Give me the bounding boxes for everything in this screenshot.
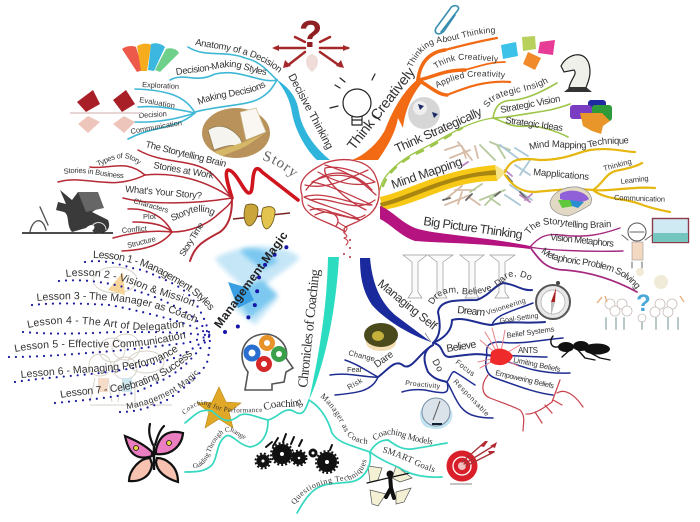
icon: head with gears	[242, 334, 293, 390]
magenta labels: The Storytelling Brain	[524, 218, 611, 233]
navy labels: Managing Self	[375, 276, 440, 333]
navy labels: Believe	[446, 338, 477, 355]
icon: theatre masks	[233, 204, 290, 229]
icon: magic blue box	[215, 246, 300, 325]
story labels: Characters	[132, 196, 170, 215]
navy labels: Belief Systems	[506, 324, 555, 340]
lesson labels: Lesson 6 - Managing Performance	[21, 346, 178, 378]
icon: chess knight	[561, 55, 592, 92]
teal labels: Coaching	[264, 398, 303, 410]
orange labels: Think Creatively	[345, 64, 419, 153]
decisive labels: Anatomy of a Decision	[195, 39, 282, 73]
branch: Big Picture Thinking	[380, 206, 640, 293]
icon: stick figure with picture	[622, 218, 688, 268]
branch: Story	[57, 139, 300, 262]
story labels: Story Time	[177, 221, 206, 258]
image: faded mind map	[443, 142, 532, 205]
yellow sub-branches	[505, 149, 670, 212]
green labels: Strategic Vision	[499, 94, 561, 116]
icon: paperclip	[435, 6, 459, 34]
icon: group with question mark	[597, 268, 684, 329]
panel: Management Magic lessons	[8, 228, 291, 414]
yellow labels: Learning	[620, 174, 649, 186]
story labels: Stories at Work	[152, 160, 215, 182]
orange labels: Thinking About Thinking	[406, 27, 495, 66]
icon: coloured brain	[550, 187, 592, 216]
story labels: Structure	[126, 234, 157, 250]
central brain scribble	[301, 160, 379, 245]
icon: neuron	[478, 328, 583, 431]
magenta labels	[423, 214, 640, 290]
green trunk dashed	[380, 118, 493, 190]
navy labels: Visioneering	[485, 298, 527, 317]
navy labels: Dream, Believe, Dare, Do	[428, 270, 532, 304]
branch: Think Creatively	[345, 27, 512, 160]
lesson labels: Lesson 4 - The Art of Delegation	[27, 316, 184, 332]
decisive labels: Decision	[139, 109, 167, 120]
story labels: Conflict	[121, 224, 148, 235]
branch: Decisive Thinking	[127, 39, 335, 160]
icon: turtle	[364, 323, 398, 351]
navy labels: Proactivity	[405, 380, 441, 391]
magenta sub-branches	[530, 228, 637, 292]
green labels: Think Strategically	[393, 104, 485, 156]
navy sub-branches	[330, 283, 570, 418]
branch: Mind Mapping	[380, 136, 672, 214]
decisive labels: Exploration	[142, 80, 179, 91]
icon: butterfly	[125, 424, 183, 482]
icon: question mark with arrows: ?	[299, 14, 322, 56]
teal labels: Coaching for Performance	[182, 400, 262, 414]
green labels	[393, 78, 564, 156]
decisive trunk	[276, 79, 330, 160]
navy labels: Focus	[454, 357, 477, 378]
story zigzag trunk	[226, 169, 298, 200]
orange labels	[345, 27, 506, 153]
brain trailing dots	[343, 239, 351, 258]
lesson labels: Lesson 1 - Management Styles	[94, 250, 214, 310]
teal labels: Questioning Techniques	[292, 460, 366, 504]
icon: ant	[551, 336, 610, 360]
teal trunk	[309, 257, 339, 400]
yellow labels: Mind Mapping Technique	[529, 136, 628, 150]
decisive labels: Evaluation	[139, 95, 176, 110]
branch: Chronicles of Coaching	[182, 257, 448, 514]
dotted lesson lines	[9, 261, 210, 412]
navy labels: Risk	[346, 376, 364, 392]
orange sub-branches	[418, 38, 510, 95]
lesson labels: Lesson 2 - Vision & Mission	[66, 270, 194, 306]
branch: Managing Self	[329, 258, 571, 419]
icon: grey globe	[408, 97, 440, 129]
orange labels: Applied Creativity	[436, 70, 506, 88]
story labels: Stories in Business	[64, 168, 124, 178]
magenta labels: Metaphoric Problem Solving	[541, 248, 640, 290]
icon: dragon and knight	[22, 190, 113, 233]
navy labels: Change	[348, 348, 376, 363]
magenta labels: Big Picture Thinking	[423, 214, 524, 242]
story labels	[64, 139, 298, 258]
icon: yes no dice	[70, 90, 140, 133]
navy labels: Empowering Beliefs	[495, 368, 555, 391]
yellow labels: Mapplications	[533, 167, 590, 183]
decisive labels: Decisive Thinking	[285, 72, 335, 152]
branch: Think Strategically	[379, 78, 571, 191]
navy labels: Limiting Beliefs	[513, 355, 562, 374]
teal labels: Coaching Models	[372, 428, 432, 444]
lesson labels: Management Magic	[126, 370, 198, 409]
story labels: The Storytelling Brain	[144, 139, 227, 170]
story labels: Story	[263, 151, 298, 177]
icon: group with question mark: ?	[636, 290, 651, 317]
decisive sub-branches	[128, 47, 277, 139]
story labels: Types of Story	[96, 152, 142, 166]
navy labels: Responsable	[452, 379, 490, 418]
lesson labels: Lesson 3 - The Manager as Coach	[37, 292, 197, 323]
green sub-branches	[493, 83, 570, 137]
icon: pillars	[403, 255, 515, 298]
icon: compass	[536, 281, 570, 319]
navy trunk	[360, 258, 431, 342]
yellow labels: Mind Mapping	[389, 154, 464, 192]
yellow labels: Communication	[614, 193, 665, 204]
story labels: What's Your Story?	[125, 184, 202, 202]
decisive labels: Making Decisions	[197, 82, 266, 105]
navy labels	[346, 270, 562, 418]
icon: gold star	[197, 387, 241, 428]
navy labels: Dream	[457, 304, 486, 319]
yellow labels	[389, 136, 665, 204]
icon: coloured bottles	[122, 43, 179, 72]
teal labels: SMART Goals	[382, 447, 435, 472]
green labels: Strategic Ideas	[505, 115, 564, 134]
story labels: Storytelling	[171, 204, 215, 220]
teal labels: Chronicles of Coaching	[296, 269, 323, 388]
yellow labels: Thinking	[602, 157, 633, 173]
icon: open book	[202, 108, 270, 158]
lesson labels	[14, 250, 214, 409]
navy labels: Dare	[372, 349, 396, 370]
navy labels: Goal-Setting	[499, 313, 539, 325]
decisive labels: Decision-Making Styles	[176, 60, 266, 75]
icon: question mark with arrows	[272, 14, 350, 72]
icon: jumping figure with wings	[367, 466, 412, 506]
magenta labels: Vision Metaphors	[550, 232, 615, 250]
orange labels: Think Creatively	[433, 54, 498, 68]
icon: clock	[420, 398, 452, 429]
icon: target with arrows	[446, 441, 497, 484]
teal sub-branches	[185, 400, 447, 513]
story sub-branches	[58, 150, 232, 261]
navy labels: ANTS	[518, 346, 538, 355]
icon: gears with runners	[256, 434, 338, 473]
yellow trunk	[380, 165, 506, 210]
teal labels	[182, 269, 435, 504]
faded lesson background figures	[89, 267, 172, 405]
magenta trunk	[380, 206, 530, 249]
Management Magic heading with dots: Management Magic	[211, 228, 291, 331]
story labels: Plot	[143, 212, 157, 221]
lesson labels: Lesson 5 - Effective Communication	[14, 333, 186, 352]
navy labels: Do	[429, 357, 445, 374]
lesson labels: Lesson 7 - Celebrating Success	[60, 351, 192, 398]
navy labels: Fear	[347, 365, 362, 374]
teal labels: Guiding Through Change	[193, 426, 246, 468]
icon: puzzle pieces	[570, 100, 612, 134]
orange trunk	[352, 79, 421, 160]
teal labels: Manager as Coach	[320, 392, 368, 444]
decisive labels: Communication	[130, 118, 183, 136]
icon: light bulb	[330, 74, 380, 125]
icon: sticky notes	[501, 36, 555, 70]
decisive labels	[130, 39, 335, 152]
